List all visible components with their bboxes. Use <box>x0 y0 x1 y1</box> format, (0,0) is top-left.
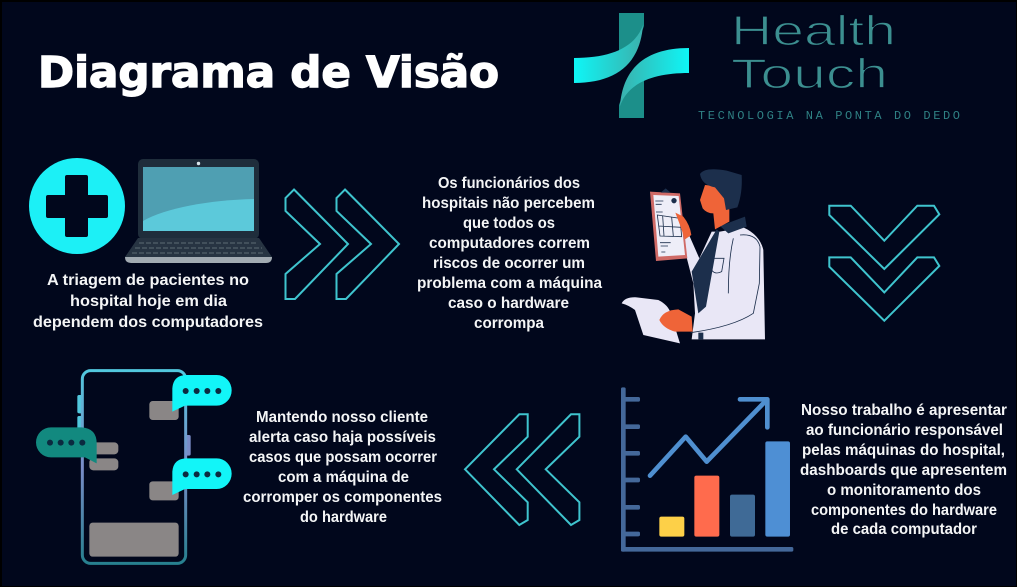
text: employees: Os funcionários dos <box>438 175 580 192</box>
text: employees: computadores correm <box>429 235 590 252</box>
text: employees <box>417 175 602 332</box>
clipboard <box>650 188 687 261</box>
text: alert: corromper os componentes <box>243 489 442 506</box>
doctor shirt and tie <box>692 229 719 339</box>
chat bubble top right <box>172 375 232 412</box>
text: our work: o monitoramento dos <box>827 482 981 499</box>
hand on paper <box>659 309 693 332</box>
text: employees: que todos os <box>463 215 555 232</box>
doctor neck and face <box>700 185 729 229</box>
logo wordmark: Health <box>731 7 896 54</box>
bars <box>659 517 684 537</box>
text: our work: ao funcionário responsável <box>806 422 1003 439</box>
phone body <box>77 371 191 563</box>
text: employees: riscos de ocorrer um <box>433 255 585 272</box>
icon: medical cross circle <box>29 158 125 254</box>
doctor coat <box>682 227 765 339</box>
text: alert: alerta caso haja possíveis <box>249 429 436 446</box>
grey message blocks <box>89 401 179 557</box>
coat lines <box>691 235 760 333</box>
chart: rising bars with arrow <box>621 387 793 552</box>
arrow: right chevrons <box>286 190 399 299</box>
chart axes <box>621 387 793 552</box>
text: alert: com a máquina de <box>278 469 409 486</box>
text: triage <box>33 272 263 331</box>
text: alert: Mantendo nosso cliente <box>256 409 428 426</box>
icon: logo cross <box>574 13 689 118</box>
paper <box>622 297 680 343</box>
logo wordmark: Touch <box>731 50 888 97</box>
text: employees: corrompa <box>474 315 544 332</box>
text: our work: dashboards que apresentem <box>800 462 1007 479</box>
text: employees: hospitais não percebem <box>422 195 595 212</box>
icon: doctor with clipboard <box>622 169 765 343</box>
text: our work: de cada computador <box>831 521 977 538</box>
text: our work: pelas máquinas do hospital, <box>802 442 1005 459</box>
text: employees: caso o hardware <box>448 295 569 312</box>
doctor hair <box>700 169 742 210</box>
text: our work: Nosso trabalho é apresentar <box>801 402 1007 419</box>
icon: laptop <box>125 159 272 263</box>
text: triage: dependem dos computadores <box>33 314 263 331</box>
arrow: left chevrons <box>465 414 579 525</box>
hand on clipboard <box>675 213 691 239</box>
logo: Health Touch <box>574 7 960 123</box>
trend arrow <box>650 399 767 476</box>
chat bubble left <box>36 427 97 463</box>
logo wordmark <box>731 7 896 97</box>
text: our work: componentes do hardware <box>811 502 997 519</box>
text: alert: casos que possam ocorrer <box>249 449 437 466</box>
text: employees: problema com a máquina <box>417 275 602 292</box>
text: our work <box>800 402 1007 538</box>
icon: phone with chat bubbles <box>36 371 232 563</box>
logo tagline: TECNOLOGIA NA PONTA DO DEDO <box>698 109 960 123</box>
text: triage: A triagem de pacientes no <box>47 272 249 289</box>
text: alert: do hardware <box>300 509 387 526</box>
chat bubble lower right <box>172 458 232 495</box>
title: Diagrama de Visão <box>38 49 499 98</box>
arrow: down chevrons <box>829 206 939 321</box>
text: alert <box>243 409 442 526</box>
text: triage: hospital hoje em dia <box>70 293 227 310</box>
